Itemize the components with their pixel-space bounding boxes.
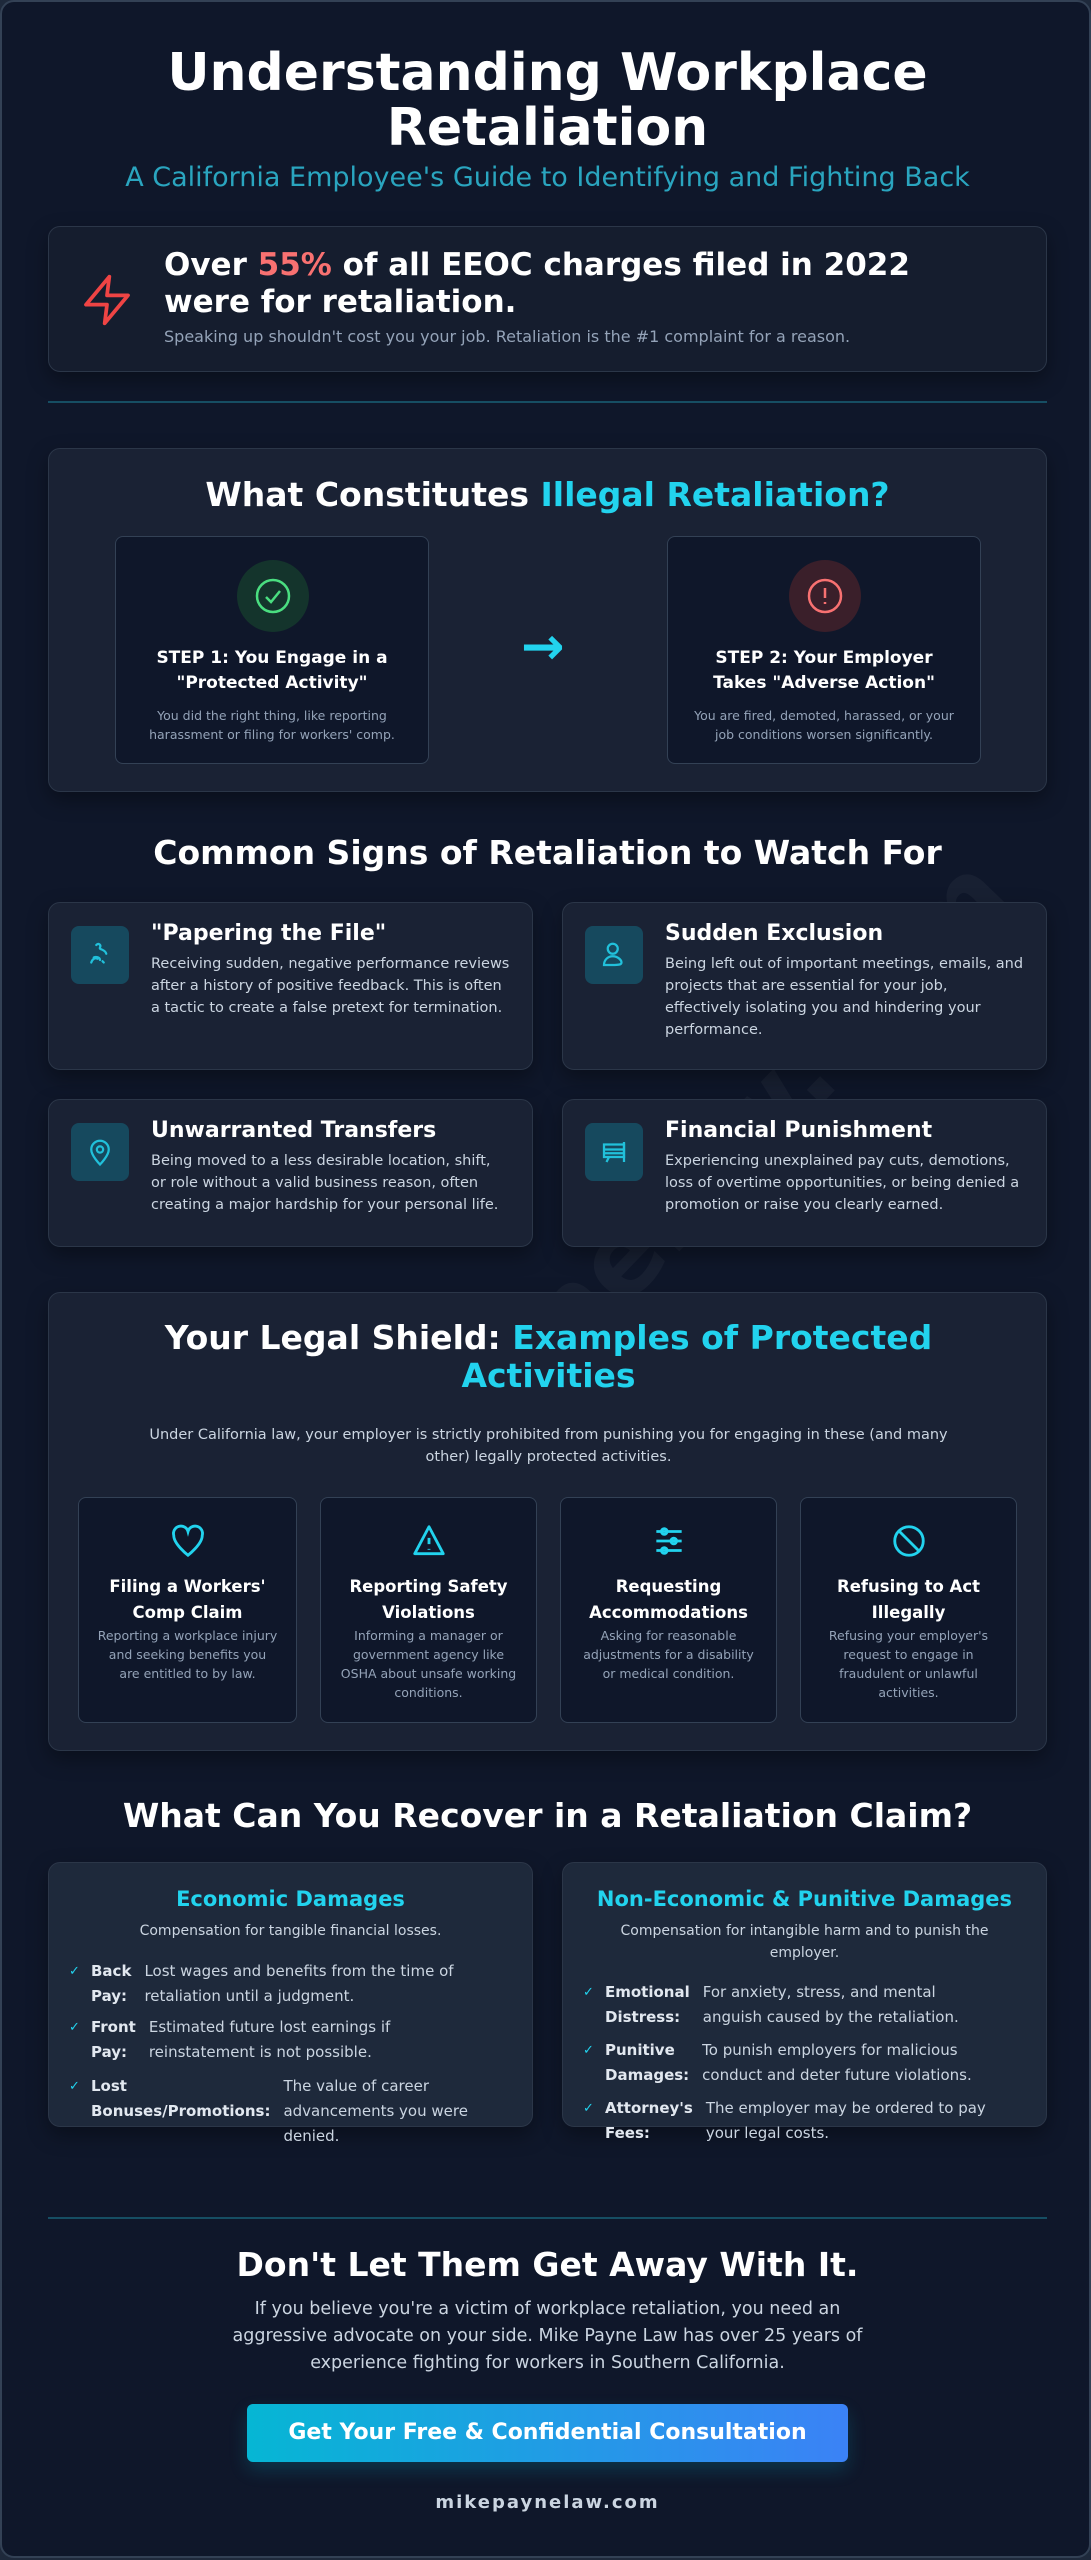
damages: non-economic: To punish employers for malicious — [702, 2041, 958, 2059]
text: Fees: — [605, 2124, 650, 2142]
cta heading: Don't Let Them Get Away With It. — [237, 2245, 858, 2284]
damages: non-economic: Non-Economic & Punitive Damages — [597, 1887, 1012, 1911]
sign: financial — [562, 1099, 1047, 1247]
title: Retaliation — [387, 98, 708, 158]
sign: papering: "Papering the File" — [151, 921, 386, 946]
damages: economic: ✓ — [69, 2079, 80, 2094]
footer domain: mikepaynelaw.com — [435, 2492, 660, 2513]
sign: transfers: Unwarranted Transfers — [151, 1118, 436, 1143]
damages: economic: Front — [91, 2018, 136, 2036]
step 1 — [115, 536, 429, 764]
damages: economic: Back — [91, 1962, 131, 1980]
step 1: STEP 1: You Engage in a — [156, 648, 388, 668]
activity: safety: Violations — [382, 1603, 475, 1622]
sign: papering — [48, 902, 533, 1070]
stat card — [48, 226, 1047, 372]
sign: financial: Financial Punishment — [665, 1118, 932, 1143]
step 2: job conditions worsen significantly. — [715, 727, 933, 742]
damages: non-economic: Attorney's — [605, 2099, 693, 2117]
icon: alert — [789, 560, 861, 632]
activity: refusing: Refusing your employer's request to engage in fraudulent or unlawful activities. — [829, 1628, 988, 1700]
damages: economic: Compensation for tangible financial losses. — [140, 1923, 441, 1939]
damages: economic: The value of career advancements you were denied. — [283, 2077, 468, 2145]
damages: economic: Economic Damages — [176, 1887, 405, 1911]
cta button — [247, 2404, 848, 2462]
cta paragraph: If you believe you're a victim of workplace retaliation, you need an aggressive advocate on your side. Mike Payne Law has over 25 years of experience fighting for workers in Southern California. — [233, 2299, 862, 2373]
sign: exclusion: Sudden Exclusion — [665, 921, 883, 946]
damages: non-economic: For anxiety, stress, and mental — [703, 1983, 936, 2001]
sign: financial: loss of overtime opportunities, or being denied a — [665, 1175, 1019, 1191]
damages: non-economic: ✓ — [583, 2101, 594, 2116]
step 2 — [667, 536, 981, 764]
subtitle: A California Employee's Guide to Identifying and Fighting Back — [125, 162, 970, 193]
text: your legal costs. — [706, 2124, 829, 2142]
activity: safety: Informing a manager or government agency like OSHA about unsafe working conditions. — [341, 1628, 516, 1700]
activity: accommodations: Asking for reasonable adjustments for a disability or medical condition. — [583, 1628, 754, 1681]
step 2: Takes "Adverse Action" — [713, 673, 935, 693]
damages: economic — [48, 1862, 533, 2127]
activity: workers comp — [78, 1497, 297, 1723]
damages: economic: Pay: — [91, 2043, 127, 2061]
activity: accommodations: Accommodations — [589, 1603, 748, 1622]
sign: transfers: creating a major hardship for your personal life. — [151, 1197, 498, 1213]
damages: non-economic: Damages: — [605, 2066, 689, 2084]
step 1: "Protected Activity" — [176, 673, 368, 693]
sign: exclusion — [562, 902, 1047, 1070]
heading: Your Legal Shield: Examples of Protected Activities — [165, 1318, 932, 1395]
damages: non-economic: Emotional — [605, 1983, 690, 2001]
damages: non-economic: ✓ — [583, 2043, 594, 2058]
heading: What Constitutes Illegal Retaliation? — [205, 475, 890, 514]
activity: refusing — [800, 1497, 1017, 1723]
heading: common signs: Common Signs of Retaliation to Watch For — [153, 833, 942, 872]
cta button: Get Your Free & Confidential Consultation — [288, 2420, 807, 2445]
damages: economic: Pay: — [91, 1987, 127, 2005]
damages: non-economic: Compensation for intangible harm and to punish the employer. — [620, 1923, 988, 1961]
stat subtext: Speaking up shouldn't cost you your job. Retaliation is the #1 complaint for a reason. — [164, 327, 850, 346]
step 2: You are fired, demoted, harassed, or your — [694, 708, 954, 723]
damages: economic: ✓ — [69, 2020, 80, 2035]
activity: refusing: Illegally — [872, 1603, 945, 1622]
sign: exclusion: performance. — [665, 1022, 762, 1038]
activity: accommodations: Requesting — [616, 1577, 721, 1596]
watermark: mikepaynelaw.com — [144, 833, 1035, 1750]
damages: non-economic: conduct and deter future violations. — [702, 2066, 972, 2084]
damages: economic: Lost — [91, 2077, 127, 2095]
damages: economic: ✓ — [69, 1964, 80, 1979]
activity: safety: Reporting Safety — [349, 1577, 508, 1596]
sign: exclusion: effectively isolating you and hindering your — [665, 1000, 981, 1016]
activity: refusing: Refusing to Act — [837, 1577, 980, 1596]
step 1: harassment or filing for workers' comp. — [149, 727, 395, 742]
heading: recover: What Can You Recover in a Retaliation Claim? — [123, 1796, 972, 1835]
sign: financial: Experiencing unexplained pay cuts, demotions, — [665, 1153, 1010, 1169]
damages: economic: Lost wages and benefits from the time of retaliation until a judgment. — [144, 1962, 454, 2005]
activity: workers comp: Comp Claim — [133, 1603, 242, 1622]
title — [167, 43, 928, 158]
damages: non-economic: ✓ — [583, 1985, 594, 2000]
step 1: You did the right thing, like reporting — [157, 708, 387, 723]
activity: workers comp: Filing a Workers' — [109, 1577, 266, 1596]
stat headline — [164, 247, 910, 320]
intro: Under California law, your employer is strictly prohibited from punishing you for engaging in these (and many other) legally protected activities. — [149, 1427, 948, 1465]
damages: economic: Estimated future lost earnings if reinstatement is not possible. — [149, 2018, 390, 2061]
activity: safety — [320, 1497, 537, 1723]
arrow: → — [521, 617, 565, 677]
panel: legal shield — [48, 1292, 1047, 1751]
damages: non-economic: anguish caused by the retaliation. — [703, 2008, 959, 2026]
damages: non-economic — [562, 1862, 1047, 2127]
damages: non-economic: Punitive — [605, 2041, 675, 2059]
damages: non-economic: Distress: — [605, 2008, 680, 2026]
sign: exclusion: Being left out of important meetings, emails, and — [665, 956, 1023, 972]
sign: transfers: Being moved to a less desirable location, shift, — [151, 1153, 491, 1169]
sign: transfers — [48, 1099, 533, 1247]
activity: accommodations — [560, 1497, 777, 1723]
sign: papering: a tactic to create a false pretext for termination. — [151, 1000, 502, 1016]
icon: check — [237, 560, 309, 632]
icon: lightning — [84, 274, 130, 326]
damages: economic: Bonuses/Promotions: — [91, 2102, 270, 2120]
stat headline: were for retaliation. — [164, 284, 516, 320]
panel: illegal retaliation — [48, 448, 1047, 792]
sign: papering: Receiving sudden, negative performance reviews — [151, 956, 509, 972]
step 2: STEP 2: Your Employer — [715, 648, 933, 668]
stat headline: Over 55% of all EEOC charges filed in 2022 — [164, 247, 910, 283]
activity: workers comp: Reporting a workplace injury and seeking benefits you are entitled to by law. — [98, 1628, 277, 1681]
sign: financial: promotion or raise you clearly earned. — [665, 1197, 943, 1213]
damages: non-economic: The employer may be ordered to pay — [706, 2099, 986, 2117]
sign: transfers: or role without a valid business reason, often — [151, 1175, 478, 1191]
sign: papering: after a history of positive feedback. This is often — [151, 978, 502, 994]
sign: exclusion: projects that are essential for your job, — [665, 978, 947, 994]
title: Understanding Workplace — [167, 43, 928, 103]
